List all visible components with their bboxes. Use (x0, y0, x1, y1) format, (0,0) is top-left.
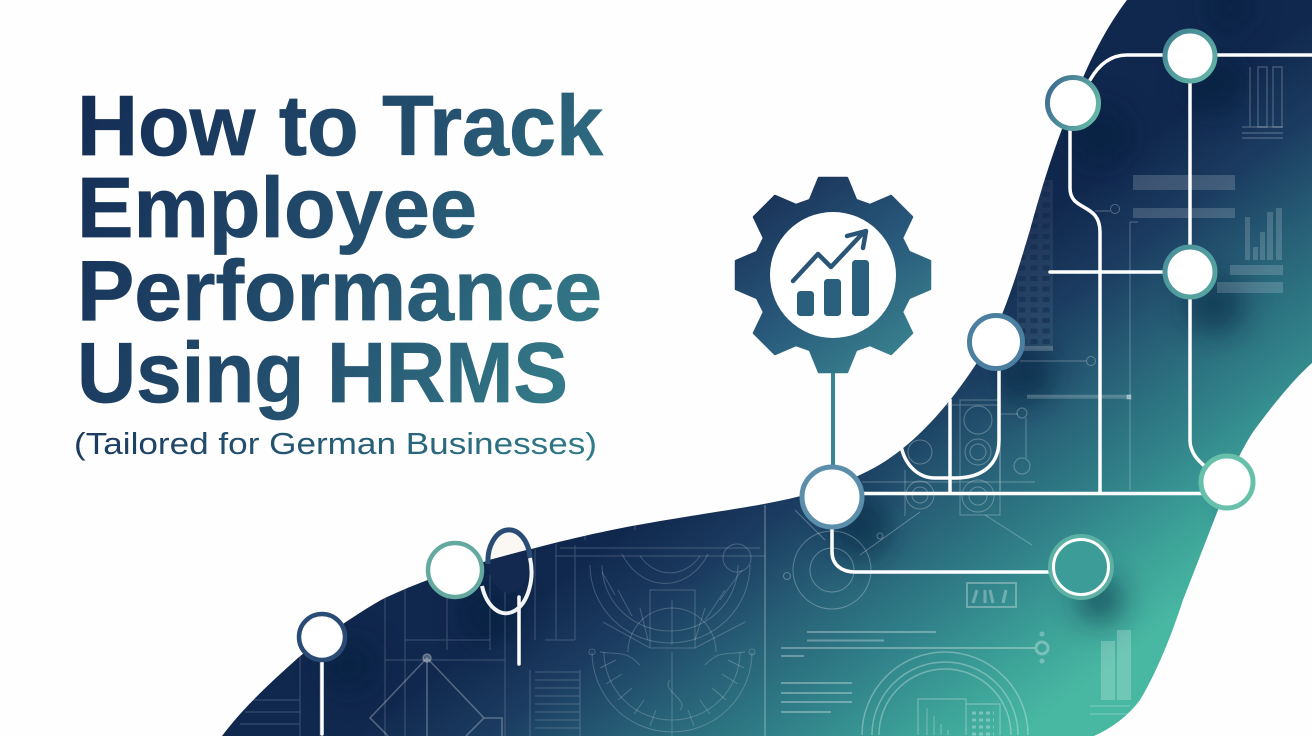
subtitle: (Tailored for German Businesses) (74, 426, 597, 461)
title (77, 79, 604, 421)
node: middle right (1165, 247, 1215, 297)
node: far right (1201, 456, 1253, 508)
blueprint machine parts (784, 204, 1138, 609)
blueprint lower right details (781, 583, 1130, 735)
node: main junction (802, 467, 862, 527)
node: lower left (299, 614, 345, 660)
connector lines (322, 55, 1312, 734)
node: top left (1048, 78, 1098, 128)
node: teal ring (428, 543, 482, 597)
node: top right (1165, 31, 1215, 81)
node: hollow teal (1048, 534, 1114, 600)
blueprint background details (240, 0, 1283, 736)
connector: gear stem (831, 372, 835, 468)
title: Using HRMS (77, 326, 568, 421)
node: partial oval (482, 530, 532, 613)
blueprint charts, upper right (1242, 67, 1283, 138)
title: How to Track (77, 79, 604, 174)
blueprint building (1017, 180, 1053, 350)
node: upper gear junction (970, 316, 1022, 368)
title: Performance (77, 244, 602, 339)
icon: gear with growth chart (736, 178, 930, 372)
node drop shadows (322, 0, 1281, 693)
title: Employee (77, 161, 477, 256)
blueprint diamond (370, 654, 502, 736)
blueprint floor plans, lower left (240, 500, 765, 736)
